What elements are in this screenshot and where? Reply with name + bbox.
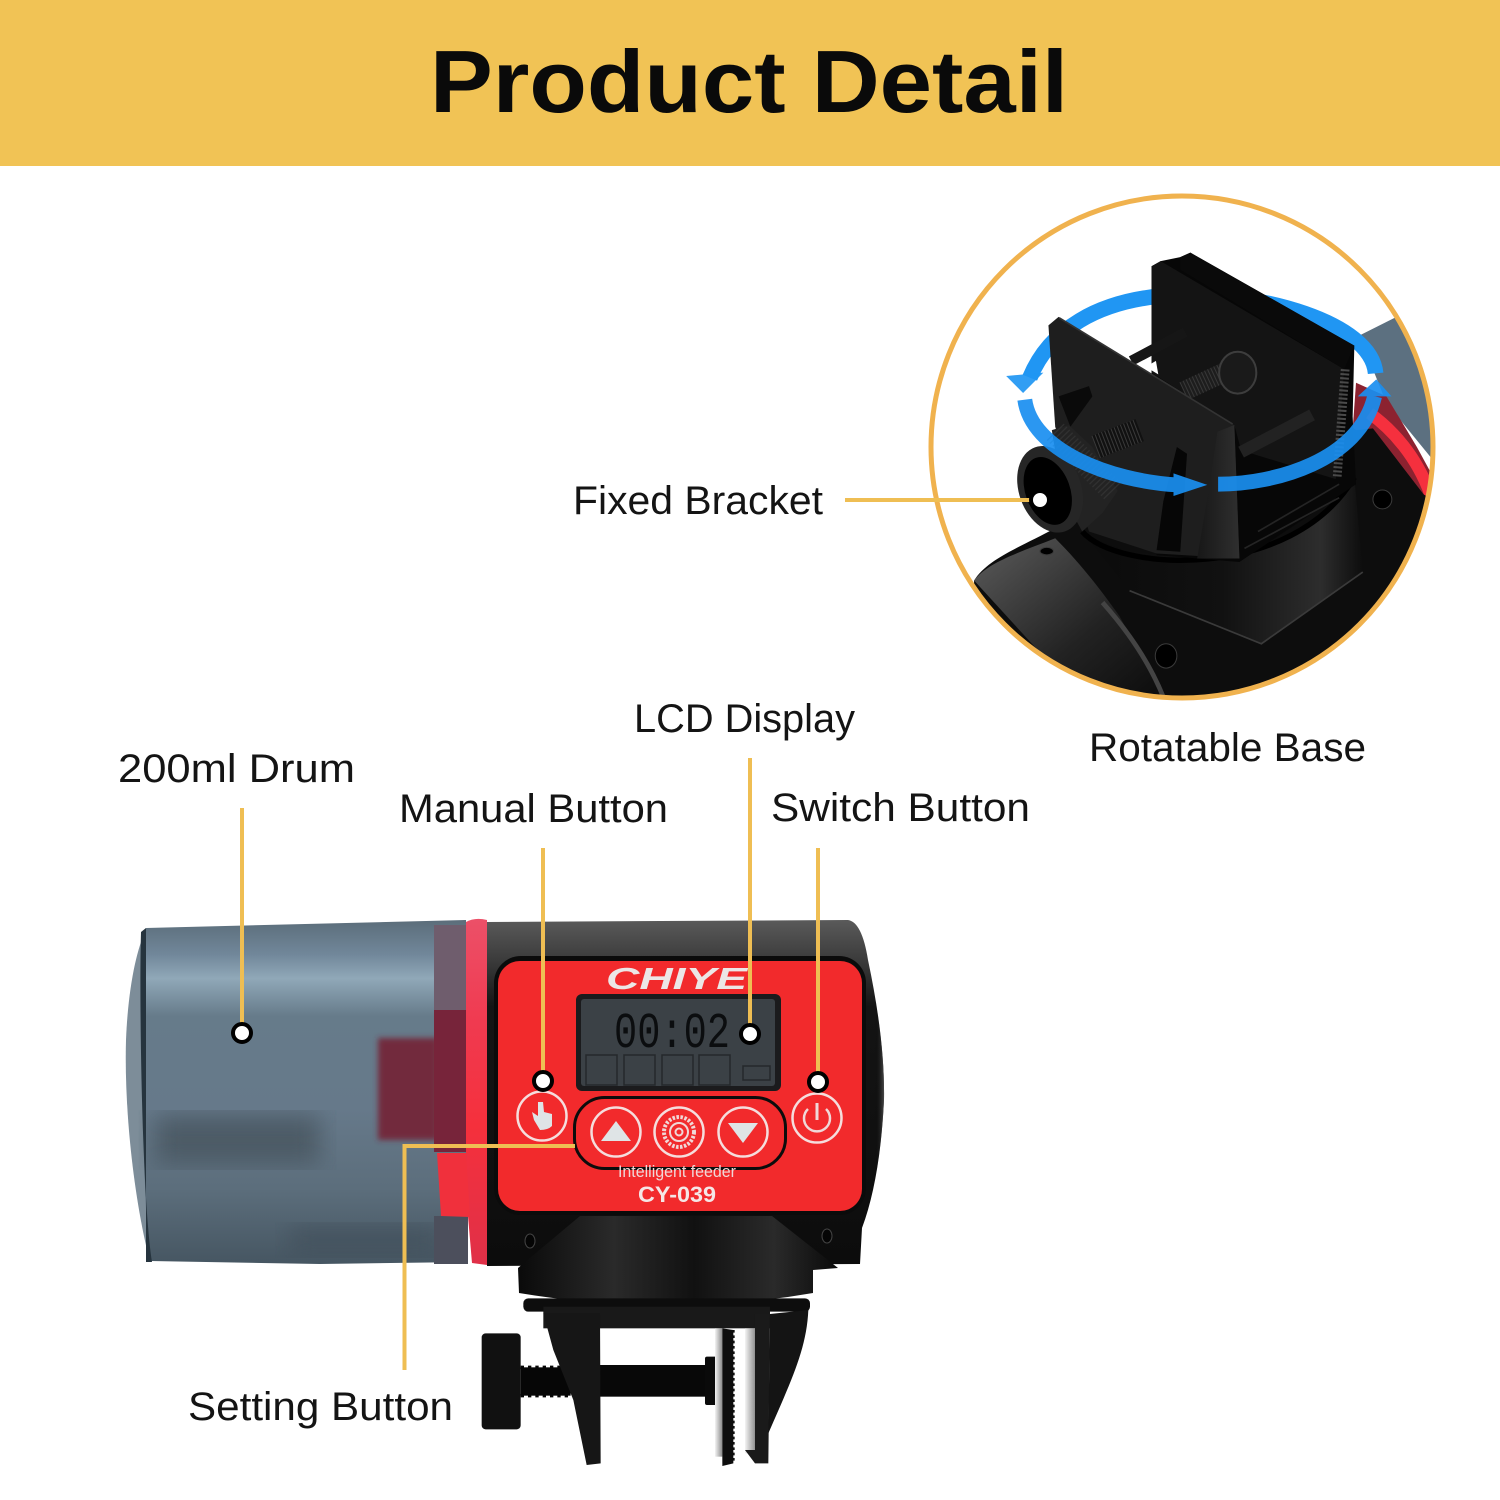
knurled knob — [1017, 424, 1120, 532]
callout: manual button — [399, 787, 668, 1090]
model number: CY-039 — [638, 1182, 716, 1207]
rear blue arrow arc — [1030, 295, 1376, 378]
down button — [718, 1108, 768, 1156]
callout: LCD display — [634, 697, 855, 1043]
detail circle: rotatable base and fixed bracket — [931, 196, 1447, 707]
red control panel — [494, 956, 866, 1215]
marker — [233, 1024, 251, 1042]
close-up image — [974, 253, 1447, 707]
title text: Product Detail — [430, 32, 1068, 131]
red latch — [437, 1153, 470, 1217]
brand logo: CHIYE — [606, 961, 749, 996]
body highlight — [974, 538, 1142, 686]
callout: switch button — [771, 786, 1030, 1091]
label: LCD Display — [634, 697, 855, 741]
callout: fixed bracket — [573, 479, 1049, 523]
base ring — [1082, 477, 1354, 560]
mounting neck — [518, 1216, 838, 1306]
base cup — [1236, 488, 1352, 642]
circle border — [931, 196, 1433, 698]
marker — [1031, 491, 1049, 509]
manual button — [518, 1092, 566, 1140]
head side highlight — [848, 960, 884, 1228]
callout: setting button — [188, 1146, 575, 1429]
label: Setting Button — [188, 1385, 453, 1429]
rear clamp plate — [1152, 261, 1344, 479]
panel caption: Intelligent feeder — [618, 1162, 736, 1181]
feeder body — [974, 428, 1426, 696]
callout: 200ml drum — [118, 747, 355, 1042]
marker — [741, 1025, 759, 1043]
leader line — [541, 848, 545, 1073]
LCD time: 00:02 — [614, 1006, 730, 1063]
background drum — [1361, 318, 1430, 457]
label: 200ml Drum — [118, 747, 355, 791]
rear rods — [1128, 344, 1152, 364]
label: Fixed Bracket — [573, 479, 823, 523]
main product: feeder front view — [126, 919, 884, 1466]
label: Switch Button — [771, 786, 1030, 830]
clamp — [482, 1298, 810, 1466]
gear button — [654, 1108, 704, 1156]
up button — [592, 1108, 640, 1156]
front screw — [1096, 430, 1140, 447]
LCD segments — [586, 1055, 770, 1085]
leader line — [240, 808, 244, 1025]
leader line — [404, 1146, 575, 1370]
rear screw — [1184, 352, 1256, 394]
title banner — [0, 0, 1500, 166]
label: rotatable base: Rotatable Base — [1089, 726, 1366, 770]
front blue arrows — [1006, 373, 1392, 496]
label: Manual Button — [399, 787, 668, 831]
leader line — [845, 498, 1032, 502]
red ring — [1353, 382, 1430, 495]
clamp back fill — [1152, 253, 1356, 562]
leader line — [748, 758, 752, 1026]
power button — [792, 1094, 842, 1142]
transparent 200ml drum — [126, 920, 468, 1264]
red ring — [466, 919, 487, 1265]
front clamp plate — [1048, 317, 1239, 559]
settings group outline — [574, 1098, 786, 1168]
LCD display — [576, 994, 781, 1091]
marker — [534, 1072, 552, 1090]
head body — [487, 920, 884, 1266]
body screws — [525, 1229, 832, 1248]
white gap — [1152, 360, 1158, 374]
mounting holes — [1040, 490, 1392, 668]
leader line — [816, 848, 820, 1074]
marker — [809, 1073, 827, 1091]
